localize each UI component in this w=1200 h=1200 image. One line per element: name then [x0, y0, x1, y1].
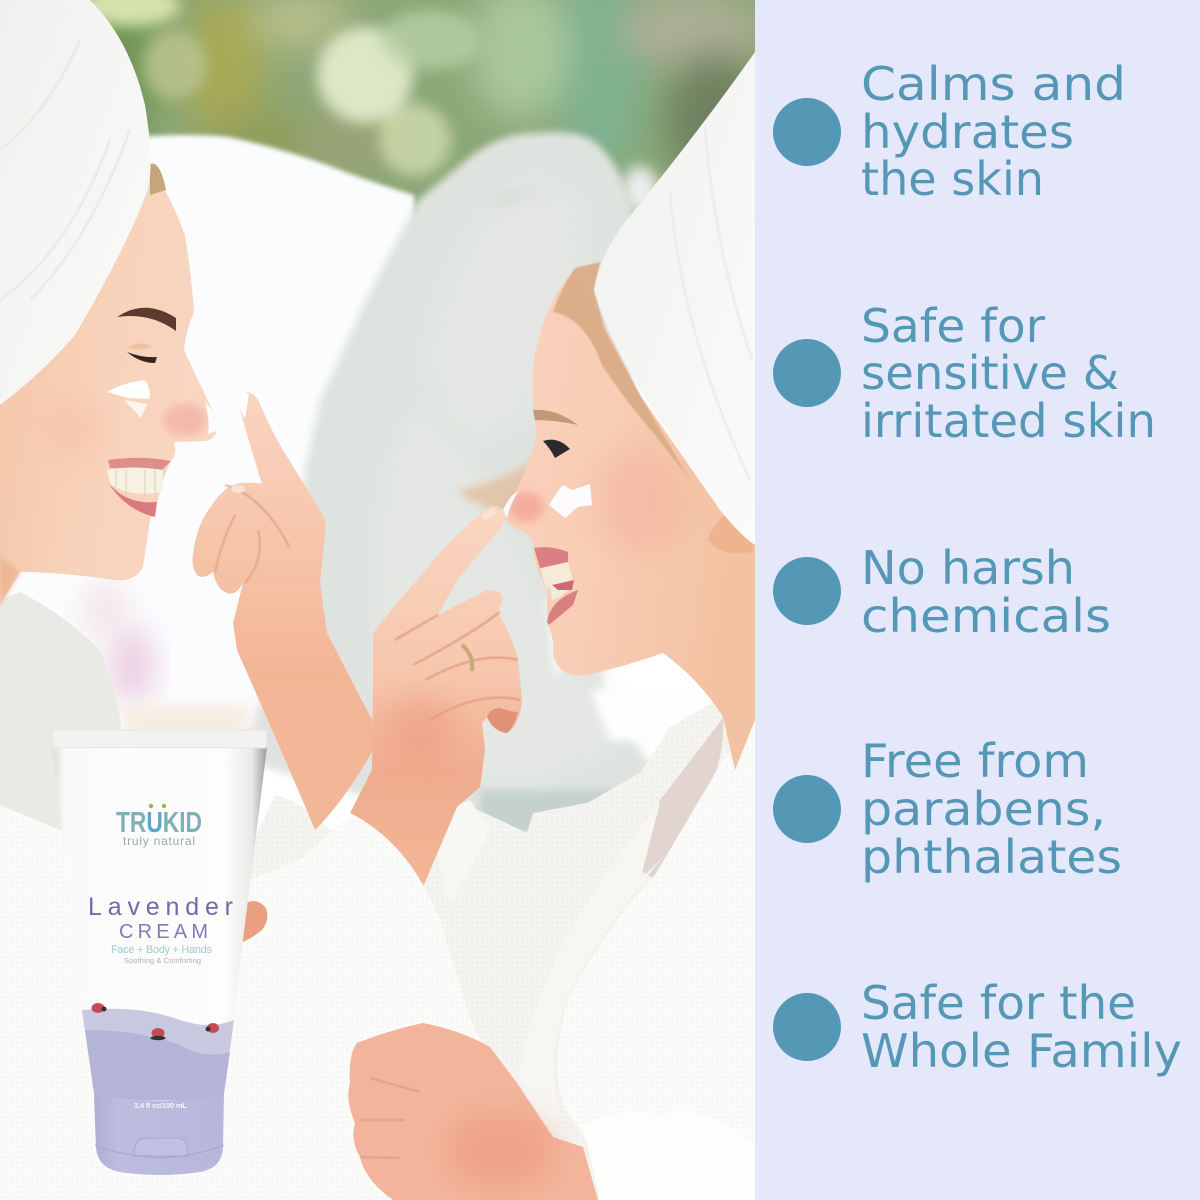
mother smile	[107, 458, 171, 517]
blurred mirror reflection of towel and figure	[250, 127, 664, 833]
finger behind tube	[243, 901, 267, 942]
benefit 1: hydrates	[861, 105, 1074, 159]
gold ring	[462, 645, 472, 671]
tube product name	[88, 893, 233, 1110]
tube product name: Soothing & Comforting	[124, 956, 201, 965]
daughter brow and eye	[533, 410, 578, 458]
blurred flowers	[80, 580, 250, 740]
tube lavender waves	[82, 1009, 234, 1100]
benefit 2: sensitive &	[861, 346, 1119, 400]
benefit 4: parabens,	[861, 782, 1106, 836]
mother sleeve	[352, 816, 424, 887]
daughter robe	[240, 700, 755, 1200]
benefit 5	[773, 976, 1182, 1078]
daughter hand on robe	[348, 1023, 598, 1200]
mother hand touching nose	[350, 506, 522, 887]
benefit 2: irritated skin	[861, 394, 1156, 448]
mother robe	[0, 592, 347, 1198]
benefit 1: the skin	[861, 152, 1044, 206]
tube product name: Face + Body + Hands	[111, 944, 212, 956]
benefit 1: Calms and	[861, 57, 1126, 111]
benefit 2	[773, 299, 1156, 448]
tube brand logo: TRUKID	[116, 807, 202, 839]
cream on daughter cheek and nose	[503, 484, 592, 518]
cream on mother cheek and nose	[107, 380, 219, 434]
benefit 2: Safe for	[861, 299, 1045, 353]
benefit 3	[773, 541, 1111, 643]
tube brand logo: truly natural	[123, 834, 195, 848]
mother face	[0, 164, 219, 605]
mother towel	[0, 0, 151, 405]
benefit 4	[773, 734, 1122, 884]
tube body	[52, 747, 267, 1098]
tube product name: 3.4 fl oz/100 mL	[134, 1101, 187, 1110]
benefit 3: chemicals	[861, 589, 1111, 643]
blurred white backdrop	[149, 132, 418, 260]
daughter face and neck	[503, 262, 755, 770]
blurred garden background	[90, 0, 755, 216]
benefit 4: phthalates	[861, 830, 1122, 884]
tube cap	[94, 1095, 224, 1175]
panel: benefits	[755, 0, 1200, 1200]
tube brand logo	[116, 804, 202, 848]
ladybugs	[92, 1003, 219, 1040]
mother brow and eye	[117, 308, 176, 363]
tube crimp	[52, 730, 267, 748]
benefit 4: Free from	[861, 734, 1089, 788]
tube product name: Lavender	[88, 893, 233, 921]
benefit 5: Safe for the	[861, 976, 1136, 1030]
product tube	[52, 730, 267, 1175]
tube product name: CREAM	[119, 921, 208, 943]
child arm and hand	[192, 392, 373, 830]
daughter smile	[534, 547, 578, 625]
benefit 5: Whole Family	[861, 1024, 1182, 1078]
daughter towel	[594, 52, 755, 545]
benefit 1	[773, 57, 1126, 206]
benefit 3: No harsh	[861, 541, 1075, 595]
